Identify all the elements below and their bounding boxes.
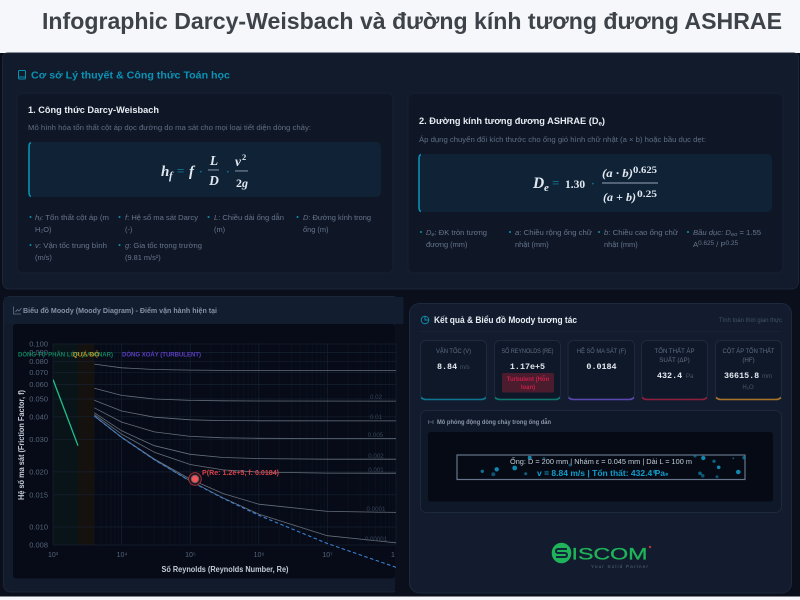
metric: pressure loss: Pa [686,374,694,380]
metric: head loss: mm [762,374,772,380]
chart: Moody plot [13,324,405,594]
bullet list: : Tổn thất cột áp (m [41,213,109,222]
roughness labels: 0.0001 [367,506,386,513]
flow regime badge: Turbulent (Hỗn [507,376,550,383]
icon: flow arrows [428,420,433,424]
roughness labels: 0.002 [368,453,384,460]
flow regime badge [502,373,554,392]
laminar zone [53,344,78,545]
chart heading: Biểu đồ Moody (Moody Diagram) - Điểm vận hành hiện tại [23,306,217,315]
metric: head loss [716,340,782,400]
icon: book [18,70,26,79]
x axis ticks: 10⁷ [322,552,333,559]
panel heading: Cơ sở Lý thuyết & Công thức Toán học [31,70,230,82]
smooth pipe curve [94,416,396,567]
simulation heading: Mô phỏng động dòng chảy trong ống dẫn [437,417,551,426]
bullet list: 0.25 [726,241,739,247]
x axis ticks: 10⁵ [185,552,196,559]
zone label: turbulent: DÒNG XOÁY (TURBULENT) [122,350,201,358]
bullet list: / P [714,240,726,249]
formula box: (a · b) [602,166,633,180]
bullet list: nhật (mm) [515,240,549,249]
metric: Reynolds: 1.17e+5 [510,362,545,372]
bullet list: đương (mm) [426,240,467,249]
metric: head loss: H₂O [742,385,754,391]
y axis ticks: 0.100 [29,340,48,348]
roughness curves [53,364,396,567]
title: Infographic Darcy-Weisbach và đường kính tương đương ASHRAE [42,8,782,34]
formula box: D [532,175,544,192]
card heading: 1. Công thức Darcy-Weisbach [28,105,159,115]
metric: head loss: 36615.8 [724,371,759,381]
bullet list: eo [731,232,737,238]
metric: pressure loss: TỔN THẤT ÁP [654,348,694,355]
panel: theory and formulas [2,53,798,289]
card: ASHRAE equivalent diameter [408,93,783,273]
y axis ticks: 0.010 [29,522,48,532]
bullet list: 0.625 [698,241,715,247]
y axis ticks: 0.090 [29,348,48,357]
logo: SISCOM [552,543,651,570]
x axis title: Số Reynolds (Reynolds Number, Re) [162,565,289,574]
metric: pressure loss: SUẤT (ΔP) [659,357,690,364]
grid [53,344,396,545]
x axis ticks: 10³ [48,552,59,559]
bullet list: Bầu dục: D [693,228,732,237]
roughness labels: 0.005 [368,432,384,439]
flow particles [481,454,746,478]
bullet list: f: Hệ số ma sát Darcy [125,213,198,222]
bullet list: D: Đường kính trong [303,213,371,222]
bullet list: (-) [125,225,132,234]
roughness labels: 0.001 [368,467,384,474]
formula box: v [235,154,242,169]
metric: Reynolds: SỐ REYNOLDS (RE) [502,348,554,355]
bullet list: H₂O) [35,225,51,234]
bullet list: a: Chiều rộng ống chữ [515,228,592,237]
formula box: f [189,164,196,180]
zone label: transition: QUÁ ĐỘ [72,350,100,358]
transition zone [78,344,94,545]
bullet list: g: Gia tốc trọng trường [125,241,202,250]
y axis ticks: 0.050 [29,394,48,404]
formula box: 0.625 [633,165,658,175]
x axis ticks: 10⁴ [117,552,127,559]
pipe [457,454,746,480]
metric: velocity: VẬN TỐC (V) [436,348,471,355]
flow regime badge: loạn) [521,385,535,391]
formula box: = [552,175,559,190]
formula box: 1.30 [565,179,585,191]
panel heading: Kết quả & Biểu đồ Moody tương tác [434,315,577,325]
y axis ticks: 0.030 [29,435,48,444]
metric: Reynolds [494,340,560,400]
logo: SISCOM: Your Solid Partner [591,564,648,570]
description: Mô hình hóa tổn thất cột áp dọc đường do ma sát cho mọi loại tiết diện dòng chảy: [28,123,311,132]
y axis title: Hệ số ma sát (Friction Factor, f) [17,390,26,500]
formula box: f [169,170,174,182]
zone label: laminar: DÒNG TỰ PHÂN LỚP (LAMINAR) [18,350,113,358]
y axis ticks: 0.080 [29,357,48,366]
bullet list: (9.81 m/s²) [125,253,161,262]
y axis ticks: 0.008 [29,540,48,550]
description: Áp dụng chuyển đổi kích thước cho ống gió hình chữ nhật (a × b) hoặc bầu dục dẹt: [419,135,706,144]
bullet list: e [431,232,435,238]
bullet list: D [426,228,432,237]
formula box [29,142,381,197]
panel: flow simulation [420,410,782,512]
formula box: = [177,163,184,178]
x axis ticks: 10⁶ [254,552,264,559]
bullet list: = 1.55 [737,228,761,237]
bullet list [30,213,371,262]
bullet list: b: Chiều cao ống chữ [604,228,678,237]
realtime note: Tính toán thời gian thực [719,317,782,324]
formula box: 2 [242,152,246,162]
metric: pressure loss [642,340,708,400]
formula box: e [544,182,549,194]
card: Darcy-Weisbach [17,93,393,273]
y axis ticks: 0.040 [29,412,48,421]
formula box: 0.25 [637,189,658,199]
y axis ticks: 0.020 [29,467,48,476]
y axis ticks: 0.015 [29,490,48,499]
metric: friction factor [568,340,634,400]
metric: velocity: 8.84 [437,362,457,372]
y axis ticks: 0.070 [29,368,48,377]
pipe parameters: Ống: D = 200 mm | Nhám ε = 0.045 mm | Dài L = 100 m [510,456,692,466]
formula box: (a + b) [603,190,636,204]
formula box: · [591,178,595,190]
y axis ticks [29,340,48,550]
metric: pressure loss: 432.4 [657,371,682,381]
metric: velocity [420,340,486,400]
bullet list: v: Vận tốc trung bình [35,241,107,250]
roughness labels: 0.01 [370,414,383,421]
bullet list: ống (m) [303,225,328,234]
metric: head loss: CỘT ÁP TỔN THẤT [722,348,775,355]
metric: velocity: m/s [460,365,470,371]
metric: head loss: (HF) [742,357,755,364]
card heading: e [598,122,603,128]
metric: friction factor: 0.0184 [586,362,617,372]
formula box: 2g [236,176,248,190]
formula box: · [199,166,203,178]
flow result: v = 8.84 m/s | Tổn thất: 432.4 Pa [537,469,666,478]
x axis ticks [48,552,395,559]
icon: chart [14,306,22,314]
bullet list: (m/s) [35,253,52,262]
bullet list: h [35,213,39,222]
formula box: D [208,173,219,188]
formula box: h [161,164,169,180]
metric: friction factor: HỆ SỐ MA SÁT (F) [577,347,626,355]
bullet list: L: Chiều dài ống dẫn [214,213,284,222]
formula box: · [226,166,230,178]
laminar line [53,380,78,446]
roughness labels: 0.02 [370,394,383,401]
y axis ticks: 0.060 [29,380,48,389]
operating point [189,468,280,485]
bullet list: nhật (mm) [604,240,638,249]
roughness labels [365,394,388,543]
bullet list [420,228,761,249]
bullet list: f [39,217,42,223]
panel: Moody diagram [4,296,405,594]
formula box [419,154,772,212]
bullet list: A [693,240,698,249]
formula box: L [209,153,218,168]
card heading: ) [602,116,605,126]
bullet list: (m) [214,225,225,234]
bullet list: : ĐK tròn tương [435,228,487,237]
x axis ticks: 1 [391,552,395,559]
panel: results [410,304,792,593]
icon: pie [421,316,429,324]
point label: P(Re: 1.2e+5, f: 0.0184) [202,468,280,477]
roughness labels: 0.00001 [365,536,388,543]
card heading: 2. Đường kính tương đương ASHRAE (D [419,116,594,126]
logo: SISCOM: ISCOM [572,546,648,564]
